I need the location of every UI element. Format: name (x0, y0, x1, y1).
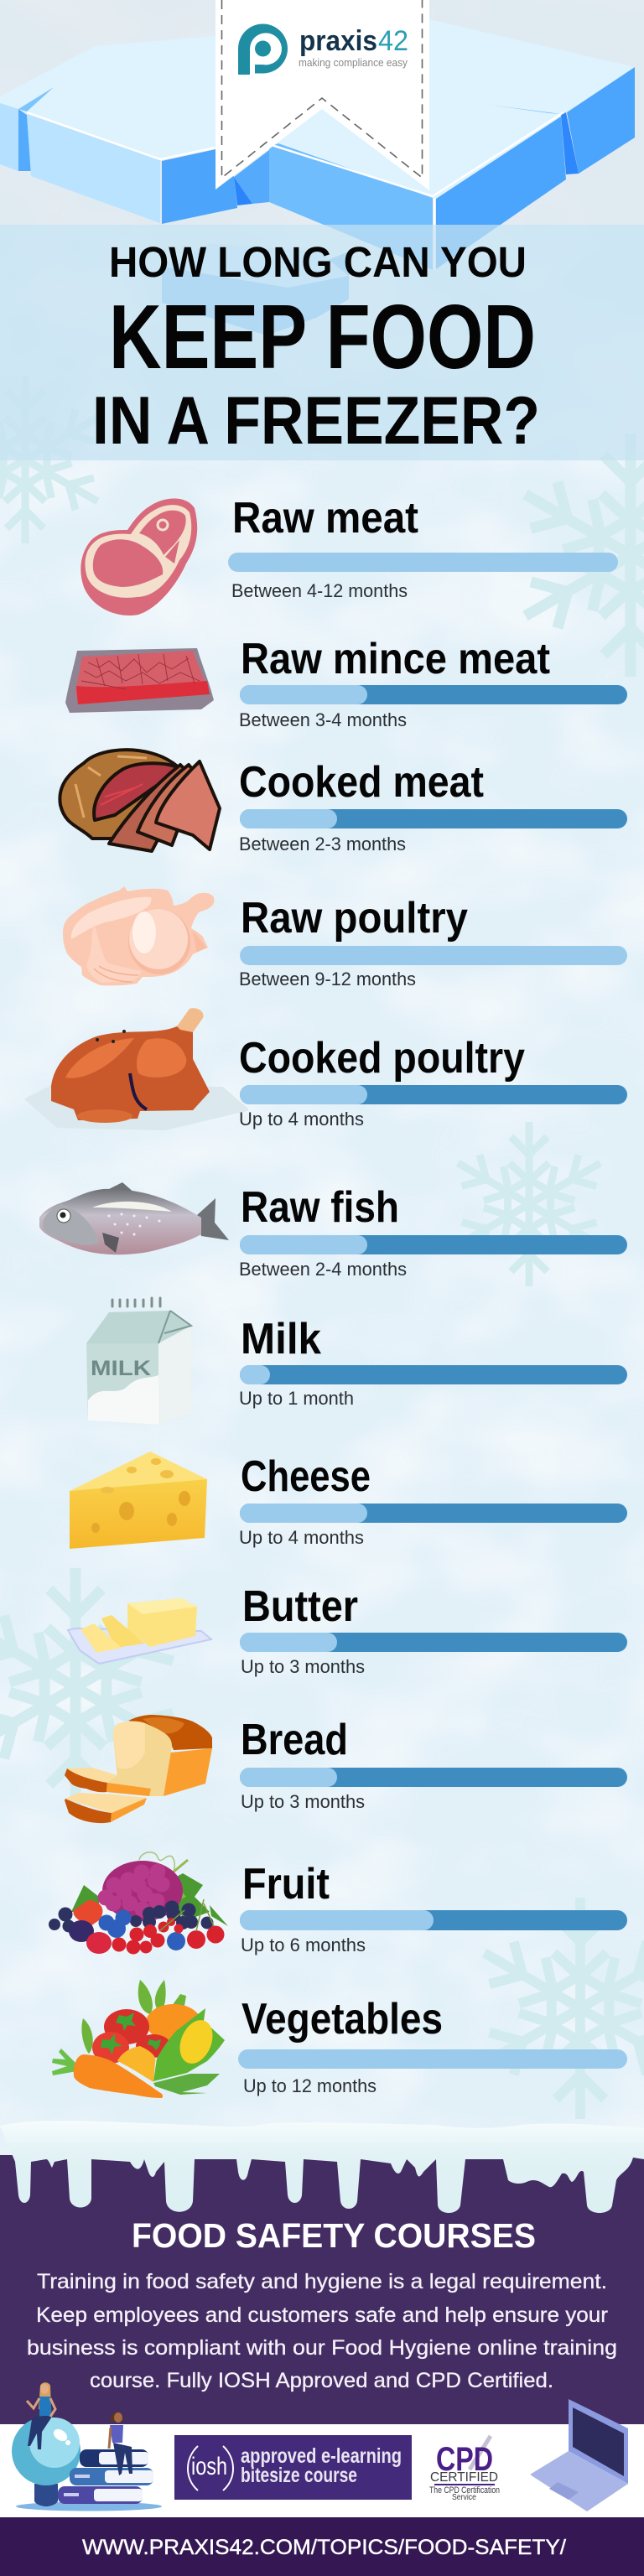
bar: bread (240, 1768, 627, 1787)
icon: raw fish (39, 1182, 229, 1254)
bar: raw poultry (240, 946, 627, 965)
bar: cooked meat (240, 809, 627, 828)
title: KEEP FOOD (109, 286, 536, 388)
bar: butter (240, 1633, 627, 1652)
item: cheese (70, 1452, 627, 1549)
label: raw mince meat: Raw mince meat (241, 635, 550, 683)
illustration: laptop (530, 2399, 628, 2511)
illustration: bulb and people (12, 2382, 162, 2511)
white strip (0, 2424, 644, 2517)
paragraph: course. Fully IOSH Approved and CPD Certified. (90, 2369, 553, 2392)
item: cooked poultry (27, 1008, 627, 1130)
footer panel (0, 2121, 644, 2576)
icon: vegetables (52, 1980, 225, 2098)
books (58, 2449, 153, 2504)
item: cooked meat (60, 750, 627, 854)
item: bread (65, 1715, 627, 1823)
duration: butter: Up to 3 months (241, 1656, 365, 1677)
bar: milk (240, 1365, 627, 1384)
item: raw fish (39, 1182, 627, 1280)
label: cheese: Cheese (241, 1452, 371, 1501)
url bar (0, 2517, 644, 2576)
label: raw fish: Raw fish (241, 1183, 399, 1232)
item: vegetables (52, 1980, 627, 2098)
duration: vegetables: Up to 12 months (243, 2075, 377, 2096)
cpd certified logo: Service (452, 2493, 476, 2502)
item: butter (68, 1582, 627, 1677)
duration: bread: Up to 3 months (241, 1791, 365, 1812)
bar: raw fish (240, 1235, 627, 1254)
duration: fruit: Up to 6 months (241, 1935, 366, 1955)
iosh badge: bitesize course (241, 2464, 357, 2487)
logo: praxis42: making compliance easy (299, 56, 408, 69)
cpd certified logo: The CPD Certification (429, 2485, 500, 2496)
iosh badge (174, 2435, 412, 2500)
logo: praxis42: praxis (299, 25, 377, 57)
icon: fruit (49, 1852, 228, 1954)
iosh badge: iosh (191, 2453, 227, 2480)
iosh badge: approved e-learning (241, 2444, 402, 2468)
bar: vegetables (238, 2049, 627, 2069)
label: cooked poultry: Cooked poultry (239, 1034, 525, 1083)
bar: fruit (240, 1910, 627, 1930)
snowflakes background (0, 376, 644, 2119)
item: raw poultry (63, 886, 627, 989)
title band (0, 225, 644, 460)
label: vegetables: Vegetables (242, 1995, 443, 2044)
item: fruit (49, 1852, 627, 1955)
title: HOW LONG CAN YOU (109, 238, 527, 286)
icon: cooked meat (60, 750, 220, 851)
cpd certified logo: CPD (436, 2441, 493, 2478)
icon: cooked poultry (27, 1008, 247, 1129)
icon: cheese (70, 1452, 207, 1549)
icon: raw mince meat (65, 648, 214, 713)
duration: cooked poultry: Up to 4 months (239, 1109, 364, 1130)
icon: milk carton: MILK (91, 1357, 151, 1380)
url: WWW.PRAXIS42.COM/TOPICS/FOOD-SAFETY/ (82, 2536, 566, 2559)
icon: raw poultry (63, 886, 214, 985)
title: IN A FREEZER? (92, 383, 540, 459)
icon: butter (68, 1598, 211, 1664)
bar: cheese (240, 1504, 627, 1523)
paragraph: business is compliant with our Food Hygiene online training (27, 2336, 617, 2360)
label: bread: Bread (241, 1716, 348, 1764)
ice block illustration (0, 19, 635, 335)
logo: praxis42: 42 (378, 25, 408, 57)
icon: raw meat (80, 498, 197, 615)
duration: cooked meat: Between 2-3 months (239, 834, 406, 854)
duration: raw fish: Between 2-4 months (239, 1259, 407, 1280)
item: raw mince meat (65, 635, 627, 730)
logo: praxis42 (238, 23, 408, 75)
snow and icicles (0, 2121, 644, 2213)
item: raw meat (80, 494, 618, 615)
icon: milk carton (86, 1298, 191, 1425)
bar: cooked poultry (240, 1085, 627, 1104)
duration: raw meat: Between 4-12 months (231, 580, 408, 601)
cpd certified logo: CERTIFIED (430, 2470, 498, 2485)
person on books (109, 2412, 132, 2475)
logo ribbon (216, 0, 429, 190)
label: milk: Milk (241, 1315, 321, 1363)
label: butter: Butter (242, 1582, 358, 1631)
person on bulb (27, 2382, 55, 2449)
icon: bread (65, 1715, 212, 1823)
duration: raw poultry: Between 9-12 months (239, 969, 416, 989)
label: raw meat: Raw meat (232, 494, 418, 543)
duration: raw mince meat: Between 3-4 months (239, 709, 407, 730)
title (92, 238, 540, 459)
purple panel (0, 2155, 644, 2425)
paragraph (27, 2270, 617, 2392)
label: raw poultry: Raw poultry (241, 894, 468, 943)
bar: raw meat (228, 553, 618, 572)
label: cooked meat: Cooked meat (239, 758, 484, 807)
label: fruit: Fruit (242, 1860, 330, 1909)
duration: cheese: Up to 4 months (239, 1527, 364, 1548)
bar: raw mince meat (240, 685, 627, 704)
item: milk (86, 1298, 627, 1425)
heading: food safety courses: FOOD SAFETY COURSES (132, 2216, 536, 2255)
paragraph: Keep employees and customers safe and help ensure your (36, 2303, 608, 2327)
cpd certified logo (429, 2436, 500, 2502)
paragraph: Training in food safety and hygiene is a legal requirement. (37, 2270, 607, 2293)
duration: milk: Up to 1 month (239, 1388, 354, 1409)
